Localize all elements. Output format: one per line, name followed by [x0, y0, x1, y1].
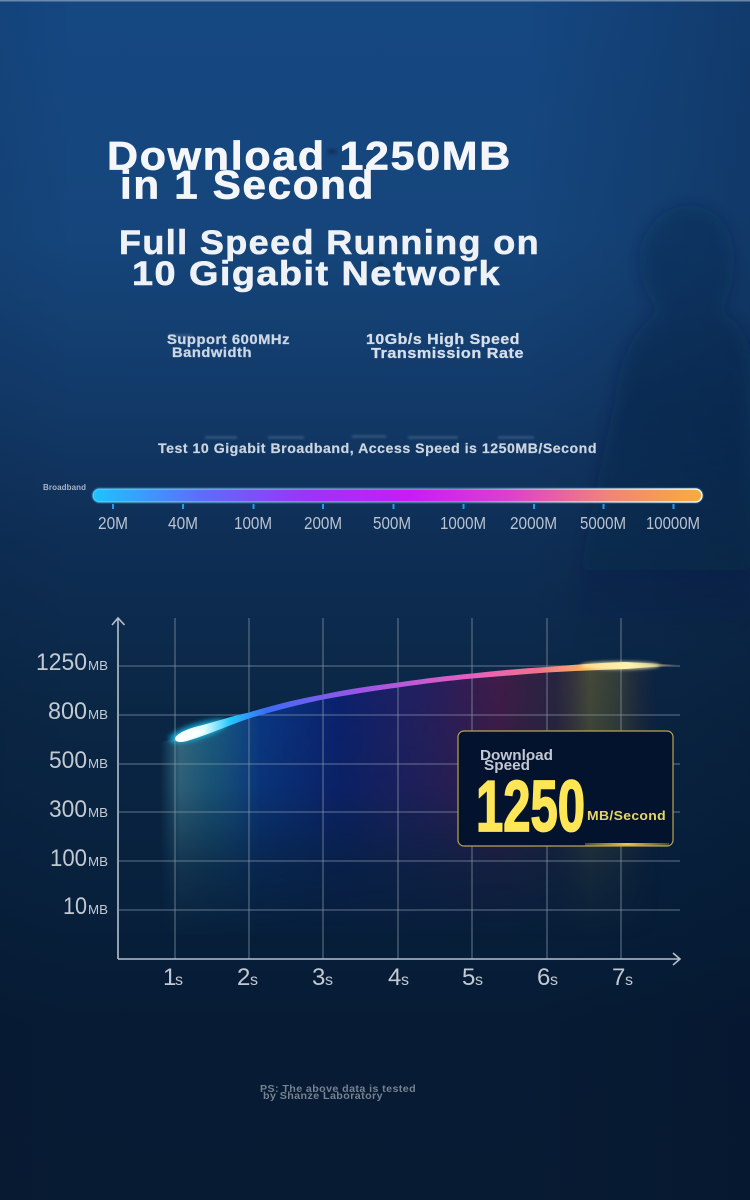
x axis labels: s [250, 972, 258, 989]
silhouette: person on the right [570, 206, 750, 640]
feature: bandwidth: Support 600MHz [167, 331, 290, 347]
callout bottom glow [585, 843, 669, 846]
x axis labels: s [550, 972, 558, 989]
callout label: Speed [484, 758, 530, 774]
gradient bar [91, 487, 704, 504]
footnote [260, 1083, 416, 1102]
broadband test caption: Test 10 Gigabit Broadband, Access Speed is 1250MB/Second [158, 440, 597, 456]
title line 1: Download 1250MB [107, 134, 512, 178]
scale values [98, 513, 700, 533]
grid lines [119, 618, 680, 959]
scale values: 1000M [440, 513, 486, 533]
x axis with arrow [118, 953, 680, 965]
y axis labels: MB [88, 902, 108, 917]
speed curve [167, 662, 682, 746]
title line 2: in 1 Second [120, 164, 375, 208]
scale values: 100M [234, 513, 272, 533]
y axis labels: 800 [48, 698, 87, 725]
callout label [480, 748, 553, 774]
y axis labels: MB [88, 658, 108, 673]
scale values: 20M [98, 513, 128, 533]
x axis labels: s [625, 972, 633, 989]
subtitle line 2: 10 Gigabit Network [132, 255, 501, 293]
y axis labels: MB [88, 756, 108, 771]
subtitle [119, 224, 540, 293]
y axis labels: MB [88, 707, 108, 722]
scale values: 500M [373, 513, 411, 533]
x axis labels: 3 [312, 964, 325, 991]
x axis labels: 5 [462, 964, 475, 991]
broadband scale [43, 483, 704, 533]
y axis labels: MB [88, 854, 108, 869]
decoration: distant birds [308, 148, 383, 267]
x axis labels: s [475, 972, 483, 989]
x axis labels: 4 [388, 964, 401, 991]
x axis labels: 6 [537, 964, 550, 991]
callout value: 1250 [476, 767, 585, 847]
feature: transmission rate [366, 331, 524, 362]
feature: transmission rate: 10Gb/s High Speed [366, 331, 520, 348]
subtitle line 1: Full Speed Running on [119, 224, 540, 262]
y axis labels: 300 [49, 796, 87, 823]
y axis labels: 500 [49, 747, 87, 774]
decoration: blurred town lights [168, 334, 534, 439]
scale label: Broadband [43, 483, 86, 492]
x axis labels: s [325, 972, 333, 989]
speed chart [36, 618, 682, 991]
title [107, 134, 512, 208]
area glow under curve [163, 668, 648, 903]
x axis labels: 7 [612, 964, 625, 991]
y axis labels: 10 [63, 893, 87, 920]
footnote: by Shanze Laboratory [263, 1090, 383, 1102]
callout: download speed [458, 731, 673, 847]
x axis labels: 1 [163, 964, 176, 991]
x axis labels: s [175, 972, 183, 989]
scale values: 200M [304, 513, 342, 533]
x axis labels [163, 964, 633, 991]
callout label: Download [480, 748, 553, 764]
callout unit: MB/Second [587, 808, 666, 823]
scale values: 10000M [646, 513, 700, 533]
footnote: PS: The above data is tested [260, 1083, 416, 1095]
y axis with arrow [112, 618, 124, 959]
scale values: 40M [168, 513, 198, 533]
feature: bandwidth: Bandwidth [172, 344, 252, 360]
x axis labels: s [401, 972, 409, 989]
scale values: 2000M [510, 513, 557, 533]
y axis labels: 100 [50, 845, 87, 872]
x axis labels: 2 [237, 964, 250, 991]
feature: bandwidth [167, 331, 290, 360]
scale ticks [112, 504, 674, 509]
y axis labels: 1250 [36, 649, 87, 676]
y axis labels [36, 649, 108, 920]
scale values: 5000M [580, 513, 626, 533]
y axis labels: MB [88, 805, 108, 820]
feature: transmission rate: Transmission Rate [371, 345, 524, 362]
